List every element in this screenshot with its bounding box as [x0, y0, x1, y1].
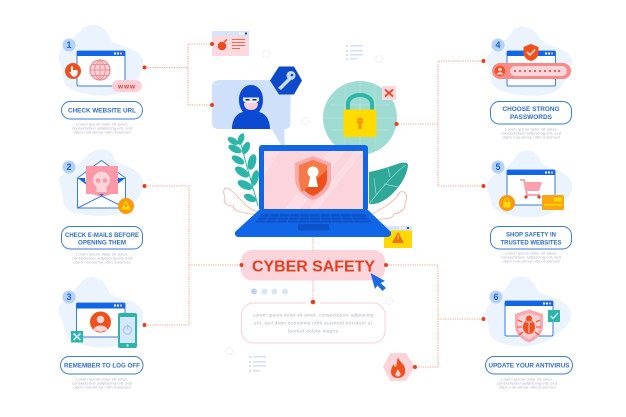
description box: laoreet dolore magna — [288, 328, 338, 334]
description 3 — [72, 376, 132, 390]
label 2: CHECK E-MAILS BEFORE — [65, 232, 140, 239]
description 1 — [72, 122, 132, 134]
connector dots banner — [240, 263, 388, 267]
icon: shield keyhole — [295, 156, 331, 200]
number 1: 1 — [66, 40, 72, 50]
icon: cursor — [370, 273, 386, 291]
label 5 — [490, 226, 572, 249]
panel: step 4 passwords — [482, 26, 572, 139]
number 4: 4 — [495, 40, 501, 50]
label 4: PASSWORDS — [510, 114, 553, 121]
panel: step 3 log off — [58, 277, 146, 390]
label 4 — [490, 102, 572, 124]
icon: browser with user and phone — [71, 303, 137, 348]
description box — [242, 300, 385, 343]
description 2: Lorem ipsum dolor sit amet, — [76, 252, 128, 256]
panel: step 1 check website url — [58, 25, 146, 134]
description 1: diam nonummy nibh euismod — [74, 130, 130, 134]
decorative plant right — [369, 163, 408, 220]
list icon top — [346, 45, 363, 60]
blob 2 — [59, 149, 143, 216]
connector dot bomb — [210, 42, 214, 46]
description 2: diam nonummy nibh euismod — [74, 260, 130, 264]
connector dot 2 — [142, 184, 146, 188]
label 2 — [62, 226, 142, 249]
blob 6 — [486, 277, 571, 346]
panel: step 2 check emails — [59, 149, 146, 264]
description 2 — [72, 252, 132, 264]
icon: shopping window — [499, 170, 564, 211]
icon: fire hexagon — [383, 353, 415, 381]
icon: key hexagon — [270, 66, 302, 94]
description 5: consectetuer adipiscing elit, sed — [501, 254, 561, 260]
number 5: 5 — [495, 162, 501, 172]
panel: step 6 antivirus — [482, 277, 572, 390]
description box: elit, sed diam nonummy nibh euismod tincidunt ut — [254, 320, 373, 326]
description 3: consectetuer adipiscing elit, sed — [72, 380, 132, 386]
title banner: CYBER SAFETY — [252, 258, 375, 276]
label 6: UPDATE YOUR ANTIVIRUS — [488, 362, 570, 369]
connector dot 5 — [482, 184, 486, 188]
description 5: Lorem ipsum dolor sit amet, — [505, 250, 557, 256]
number 2: 2 — [66, 162, 72, 172]
icon: password window — [492, 44, 571, 86]
connector dot 4 — [482, 59, 486, 63]
description 6: Lorem ipsum dolor sit amet, — [501, 376, 553, 382]
connector dot 3 — [142, 323, 146, 327]
icon: padlock on teal circle — [323, 81, 397, 155]
pagination dots — [251, 288, 288, 294]
description 4: diam nonummy nibh euismod — [502, 134, 560, 140]
description 2: consectetuer adipiscing elit, sed — [72, 256, 132, 260]
connector lines — [145, 44, 483, 367]
description 6 — [497, 376, 557, 390]
label 3: REMEMBER TO LOG OFF — [64, 362, 140, 369]
background gears — [226, 50, 392, 354]
icon: browser globe: www — [117, 84, 136, 90]
icon: malware bomb window — [212, 31, 249, 56]
connector dot description — [311, 300, 315, 304]
icon: envelope with skull — [78, 160, 134, 214]
description 4 — [501, 126, 561, 140]
connector dot 1 — [142, 66, 146, 70]
label 5: TRUSTED WEBSITES — [500, 240, 562, 246]
description 6: consectetuer adipiscing elit, sed — [497, 380, 557, 386]
description 4: consectetuer adipiscing elit, sed — [501, 130, 561, 136]
blob 3 — [58, 277, 143, 348]
description 4: Lorem ipsum dolor sit amet, — [505, 126, 557, 132]
blob 1 — [58, 25, 143, 96]
title banner — [241, 250, 385, 280]
description 6: diam nonummy nibh euismod — [498, 384, 556, 390]
icon: hacker speech bubble — [212, 80, 290, 151]
list icon bottom — [249, 356, 266, 372]
label 4: CHOOSE STRONG — [502, 106, 560, 113]
decorative plant left — [224, 132, 260, 214]
number 3: 3 — [66, 292, 72, 302]
connector dot fire — [413, 365, 417, 369]
description 1: Lorem ipsum dolor sit amet, — [76, 122, 128, 126]
connector dot padlock — [394, 122, 398, 126]
icon: warning window — [384, 226, 412, 248]
blob 4 — [486, 26, 572, 96]
description 1: consectetuer adipiscing elit, sed — [72, 126, 132, 130]
laptop — [235, 145, 391, 237]
description 3: diam nonummy nibh euismod — [74, 384, 130, 390]
number 6: 6 — [493, 292, 499, 302]
panel: step 5 shop safely — [482, 150, 572, 264]
blob 5 — [486, 150, 572, 218]
description 5: diam nonummy nibh euismod — [502, 258, 560, 264]
connector dot 6 — [482, 317, 486, 321]
description 3: Lorem ipsum dolor sit amet, — [76, 376, 128, 382]
label 2: OPENING THEM — [78, 240, 126, 246]
label 1: CHECK WEBSITE URL — [68, 107, 136, 114]
description box: Lorem ipsum dolor sit amet, consectetuer adipiscing — [252, 312, 374, 318]
description 5 — [501, 250, 561, 264]
icon: bug shield window — [505, 301, 560, 342]
label 5: SHOP SAFETY IN — [506, 232, 556, 238]
connector dot hacker — [210, 103, 214, 107]
